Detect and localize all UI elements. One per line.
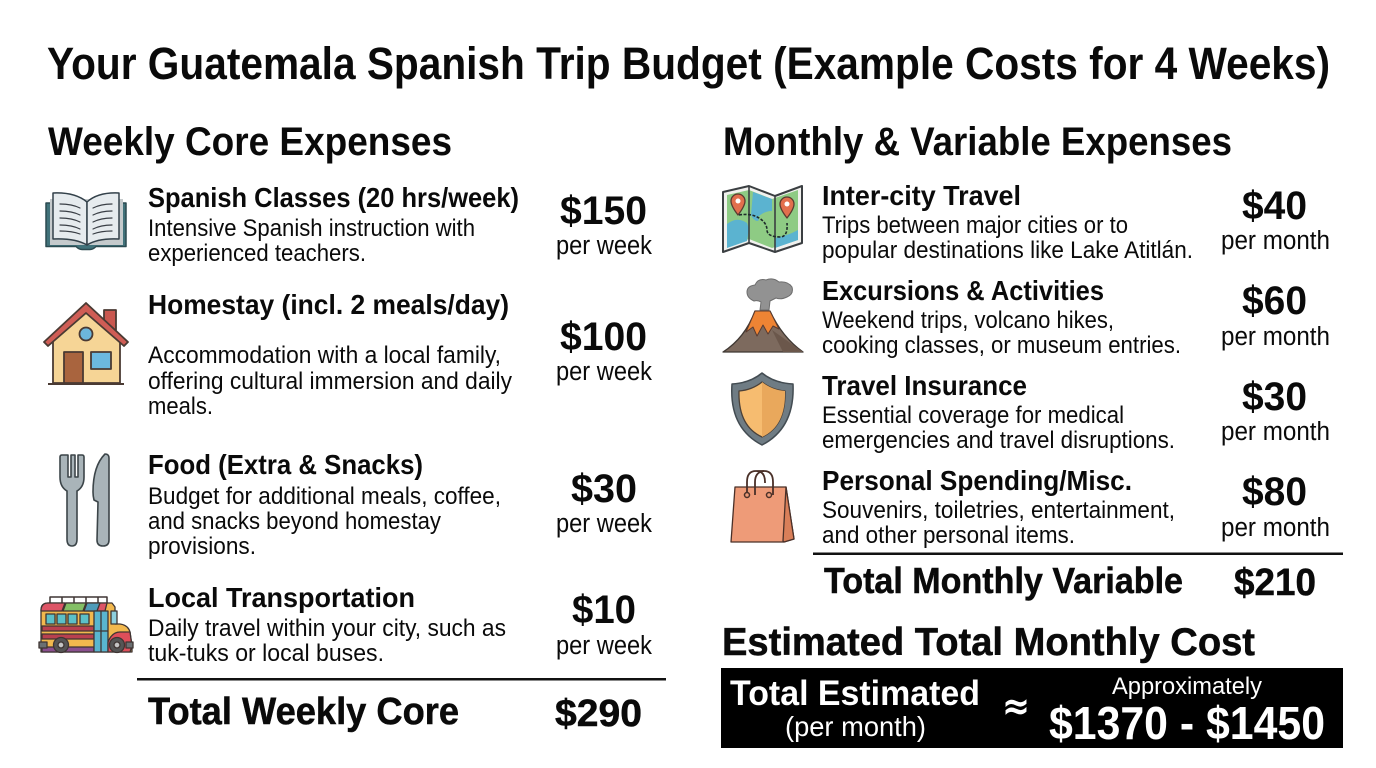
callout: total estimated: [721, 668, 1343, 749]
total: monthly variable: Total Monthly Variable: [824, 560, 1183, 601]
item: excursions and activities: per month: [1221, 323, 1330, 351]
icon: open book: [46, 193, 126, 250]
item: travel insurance: Essential coverage for medical: [822, 402, 1124, 429]
item: spanish classes: $150: [560, 189, 647, 233]
item: spanish classes: per week: [556, 232, 652, 260]
item: food: Food (Extra & Snacks): [148, 449, 423, 480]
icon: shield: [732, 373, 793, 445]
icon: fork and knife: [60, 454, 109, 546]
item: spanish classes: Intensive Spanish instruction with: [148, 215, 475, 242]
item: homestay: per week: [556, 358, 652, 386]
item: food: provisions.: [148, 533, 256, 560]
item: local transportation: Daily travel within your city, such as: [148, 615, 506, 642]
item: homestay: Accommodation with a local family,: [148, 342, 501, 369]
heading: estimated total monthly cost: Estimated Total Monthly Cost: [722, 621, 1255, 664]
callout: total estimated: Approximately: [1112, 673, 1262, 700]
total: monthly variable: $210: [1234, 562, 1316, 604]
item: local transportation: Local Transportation: [148, 582, 415, 613]
callout: total estimated: $1370 - $1450: [1049, 697, 1325, 749]
callout: total estimated: (per month): [785, 711, 926, 742]
heading: monthly and variable expenses: Monthly & Variable Expenses: [723, 120, 1232, 164]
panel: monthly and variable expenses: [723, 120, 1343, 604]
item: travel insurance: Travel Insurance: [822, 370, 1027, 401]
icon: volcano: [723, 279, 803, 352]
item: homestay: [148, 289, 652, 420]
item: inter-city travel: Trips between major cities or to: [822, 212, 1128, 239]
item: excursions and activities: [822, 275, 1330, 359]
heading: weekly core expenses: Weekly Core Expenses: [48, 120, 452, 164]
item: local transportation: $10: [572, 588, 636, 632]
item: inter-city travel: $40: [1242, 184, 1307, 228]
item: local transportation: [148, 582, 652, 667]
callout: total estimated: Total Estimated: [730, 674, 980, 713]
item: personal spending: per month: [1221, 514, 1330, 542]
item: food: Budget for additional meals, coffee,: [148, 483, 501, 510]
item: spanish classes: [148, 182, 652, 267]
item: spanish classes: Spanish Classes (20 hrs/week): [148, 182, 519, 213]
total: weekly core: Total Weekly Core: [148, 691, 459, 733]
icon: chicken bus: [39, 597, 133, 652]
item: travel insurance: $30: [1242, 375, 1307, 419]
icon: map: [723, 186, 802, 252]
item: personal spending: and other personal items.: [822, 522, 1075, 549]
icon: shopping bag: [731, 471, 794, 542]
item: inter-city travel: per month: [1221, 227, 1330, 255]
icon: house: [44, 303, 128, 384]
item: local transportation: per week: [556, 632, 652, 660]
item: inter-city travel: popular destinations like Lake Atitlán.: [822, 237, 1193, 264]
item: homestay: meals.: [148, 393, 213, 420]
item: travel insurance: [822, 370, 1330, 454]
item: inter-city travel: Inter-city Travel: [822, 180, 1021, 211]
item: homestay: offering cultural immersion and daily: [148, 368, 513, 395]
item: travel insurance: per month: [1221, 418, 1330, 446]
item: homestay: $100: [560, 315, 647, 359]
item: excursions and activities: cooking classes, or museum entries.: [822, 332, 1181, 359]
total: weekly core: [148, 691, 642, 735]
total: weekly core: $290: [555, 693, 642, 735]
item: local transportation: tuk-tuks or local buses.: [148, 640, 384, 667]
item: personal spending: Souvenirs, toiletries, entertainment,: [822, 497, 1175, 524]
panel: weekly core expenses: [39, 120, 666, 735]
item: homestay: Homestay (incl. 2 meals/day): [148, 289, 509, 320]
item: food: [148, 449, 652, 560]
item: excursions and activities: Weekend trips, volcano hikes,: [822, 307, 1114, 334]
item: food: $30: [571, 467, 637, 511]
item: personal spending: $80: [1242, 470, 1307, 514]
item: inter-city travel: [822, 180, 1330, 264]
item: excursions and activities: $60: [1242, 279, 1307, 323]
item: excursions and activities: Excursions & Activities: [822, 275, 1104, 306]
item: spanish classes: experienced teachers.: [148, 240, 366, 267]
callout: total estimated: ≈: [1002, 684, 1030, 728]
item: personal spending: [822, 465, 1330, 549]
item: personal spending: Personal Spending/Misc.: [822, 465, 1132, 496]
item: food: per week: [556, 510, 652, 538]
item: travel insurance: emergencies and travel disruptions.: [822, 427, 1175, 454]
item: food: and snacks beyond homestay: [148, 508, 442, 535]
